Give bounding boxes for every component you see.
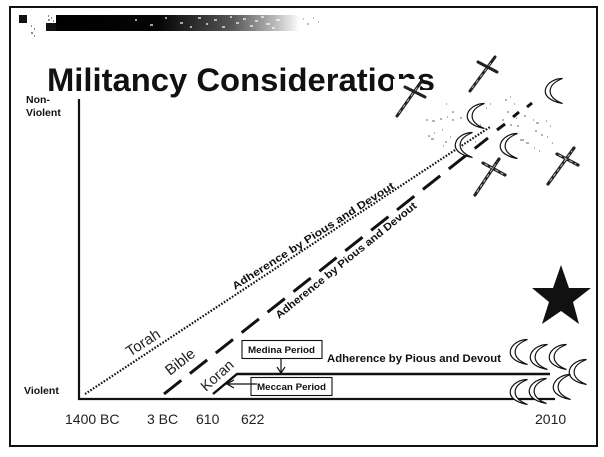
x axis labels: 3 BC bbox=[147, 411, 178, 427]
header fading bar bbox=[31, 15, 319, 36]
star bbox=[532, 265, 591, 324]
icon: cross right bbox=[548, 148, 578, 184]
Koran and military line bbox=[213, 374, 550, 394]
line labels: Bible bbox=[162, 345, 199, 379]
Medina Period box: Medina Period bbox=[248, 345, 315, 356]
lower crescents bbox=[510, 339, 586, 404]
Bible adherence label: Adherence by Pious and Devout bbox=[273, 200, 420, 321]
line labels: Koran bbox=[198, 357, 237, 395]
crosses bbox=[397, 57, 578, 195]
line labels bbox=[123, 326, 237, 395]
line labels: Torah bbox=[123, 326, 164, 360]
upper crescents bbox=[455, 78, 562, 158]
Torah line bbox=[85, 127, 490, 394]
icon: cross middle bbox=[475, 159, 505, 195]
arrow: Medina to line bbox=[277, 358, 285, 373]
arrow: Meccan to line bbox=[227, 380, 257, 388]
title: Militancy Considerations bbox=[47, 62, 435, 98]
Koran adherence label: Adherence by Pious and Devout bbox=[327, 353, 501, 365]
axes bbox=[79, 99, 555, 399]
y axis top label: Non- bbox=[26, 94, 50, 106]
icon: cross top left bbox=[397, 82, 425, 116]
icon: cross top bbox=[470, 57, 497, 91]
x axis labels bbox=[65, 411, 566, 427]
header bullet square bbox=[19, 15, 27, 23]
Bible line end fragments bbox=[497, 103, 532, 130]
Meccan Period box bbox=[251, 378, 332, 396]
Torah adherence label: Adherence by Pious and Devout bbox=[230, 180, 397, 293]
x axis labels: 2010 bbox=[535, 411, 566, 427]
x axis labels: 1400 BC bbox=[65, 411, 119, 427]
Bible line bbox=[164, 138, 488, 394]
Meccan Period box: Meccan Period bbox=[257, 382, 326, 393]
Medina Period box bbox=[242, 340, 322, 358]
y axis bottom label: Violent bbox=[24, 385, 59, 397]
noise cloud bbox=[426, 97, 553, 151]
x axis labels: 622 bbox=[241, 411, 265, 427]
x axis labels: 610 bbox=[196, 411, 220, 427]
y axis top label: Violent bbox=[26, 107, 61, 119]
